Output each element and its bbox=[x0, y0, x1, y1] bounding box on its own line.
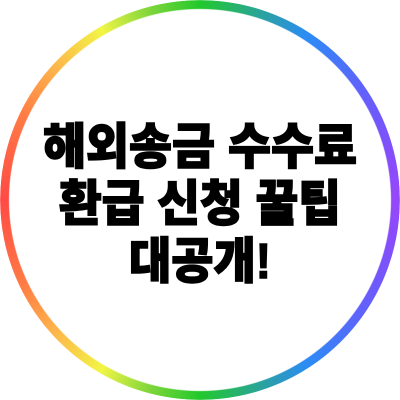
title line 1: 해외송금 수수료 bbox=[43, 120, 357, 174]
title line 2: 환급 신청 꿀팁 bbox=[59, 178, 341, 232]
title line 3: 대공개! bbox=[129, 235, 271, 289]
